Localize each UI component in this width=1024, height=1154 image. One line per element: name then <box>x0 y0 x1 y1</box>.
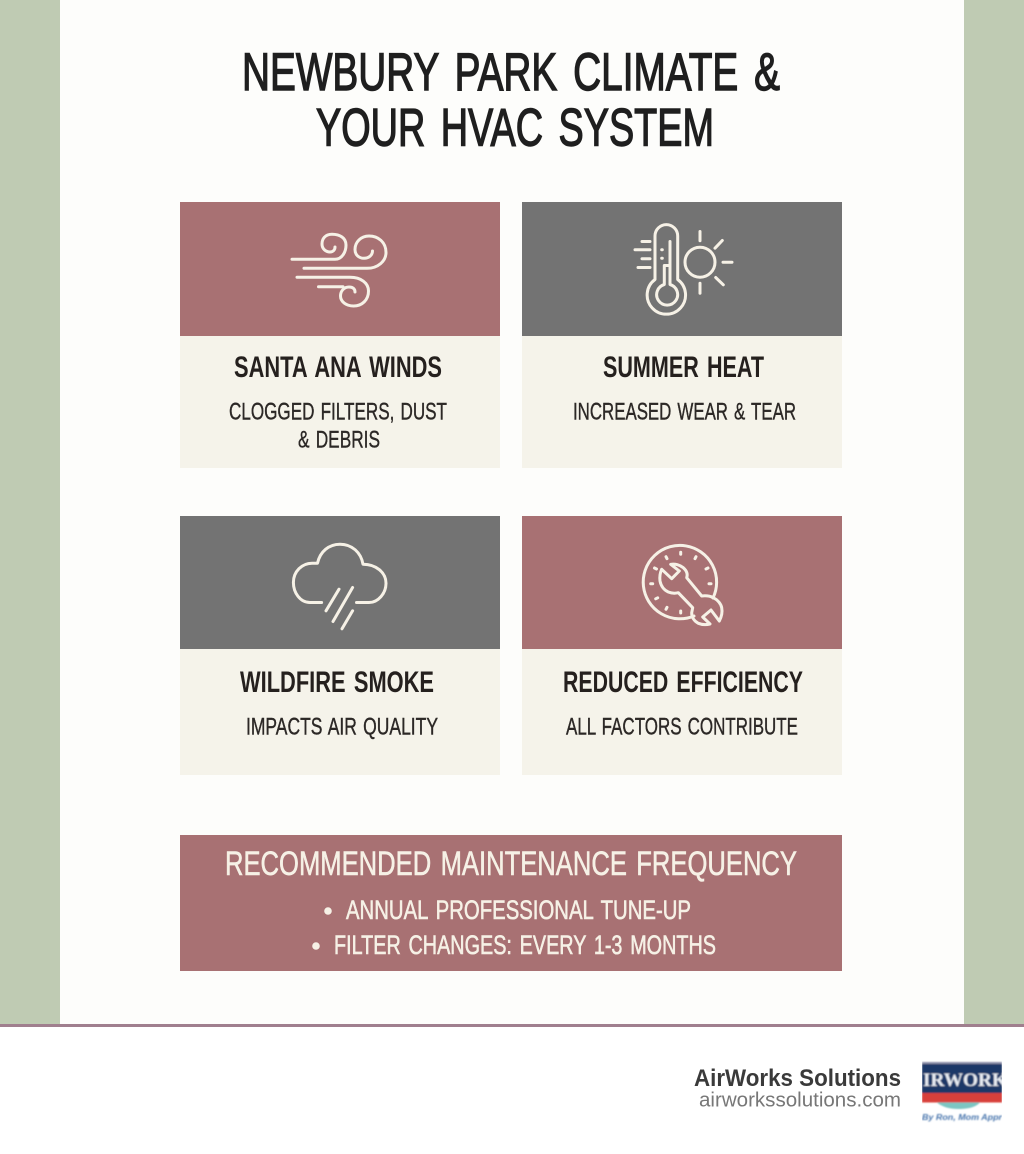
heading: SUMMER HEAT <box>603 351 764 384</box>
description: & DEBRIS <box>298 426 380 454</box>
heading: SANTA ANA WINDS <box>234 351 442 384</box>
footer brand text: airworkssolutions.com <box>699 1090 901 1112</box>
heading: REDUCED EFFICIENCY <box>563 666 803 699</box>
description <box>229 398 447 454</box>
page background panel <box>60 0 964 1024</box>
right green sidebar <box>964 0 1024 1024</box>
panel: Santa Ana winds <box>180 202 500 468</box>
panel: wildfire smoke <box>180 516 500 775</box>
description: CLOGGED FILTERS, DUST <box>229 398 447 426</box>
banner heading: RECOMMENDED MAINTENANCE FREQUENCY <box>225 845 797 883</box>
left green sidebar <box>0 0 60 1024</box>
footer brand text <box>694 1065 901 1112</box>
icon: thermometer and sun <box>635 225 732 314</box>
description: ALL FACTORS CONTRIBUTE <box>566 714 798 740</box>
footer divider <box>0 1024 1024 1027</box>
footer logo: By Ron, Mom Appr <box>922 1113 1003 1122</box>
footer brand text: AirWorks Solutions <box>694 1065 901 1092</box>
description: IMPACTS AIR QUALITY <box>246 714 438 740</box>
icon: wind <box>292 234 386 306</box>
title: YOUR HVAC SYSTEM <box>316 98 714 158</box>
icon: gauge and wrench <box>643 545 722 625</box>
bullet: annual tune-up: ANNUAL PROFESSIONAL TUNE-UP <box>346 895 691 925</box>
panel: summer heat <box>522 202 842 468</box>
panel: recommended maintenance frequency <box>180 835 842 971</box>
footer logo: IRWORK <box>923 1070 1007 1091</box>
description: INCREASED WEAR & TEAR <box>573 398 796 426</box>
heading: WILDFIRE SMOKE <box>240 666 434 699</box>
title <box>242 43 780 158</box>
title: NEWBURY PARK CLIMATE & <box>242 43 780 102</box>
bullet: filter changes: FILTER CHANGES: EVERY 1-3 MONTHS <box>334 930 716 960</box>
panel: reduced efficiency <box>522 516 842 775</box>
footer logo <box>922 1062 1007 1122</box>
icon: cloud with rain <box>293 544 386 629</box>
